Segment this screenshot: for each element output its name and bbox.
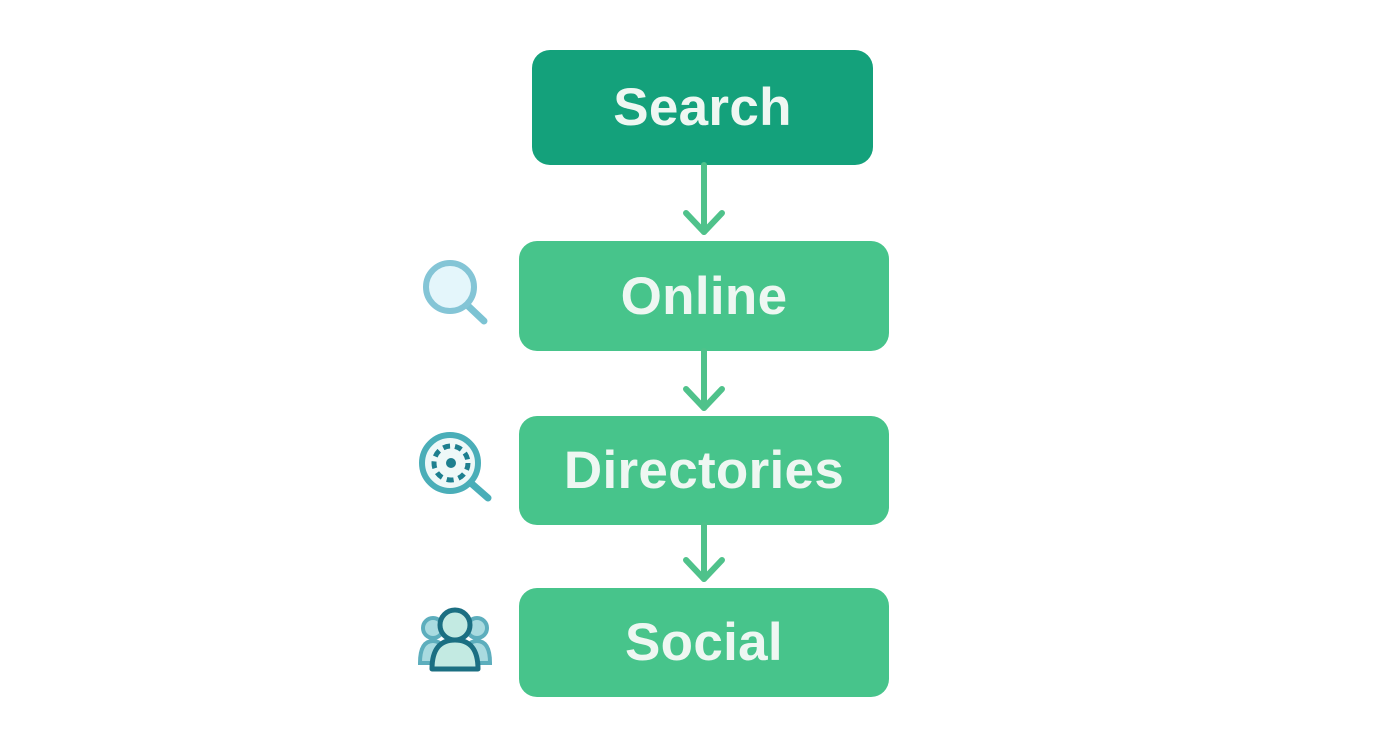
icon: people group [420,610,490,669]
box: Social: Social [625,613,783,672]
icon: directory magnifier [422,435,488,498]
box: Directories [519,416,889,525]
icon: magnifier [426,263,484,321]
arrow: Directories to Social [686,525,722,579]
arrow: Search to Online [686,165,722,232]
box: Search [532,50,873,165]
box: Online [519,241,889,351]
box: Search: Search [613,78,792,137]
arrow: Online to Directories [686,351,722,408]
box: Online: Online [621,266,787,326]
box: Directories: Directories [564,441,844,500]
box: Social [519,588,889,697]
